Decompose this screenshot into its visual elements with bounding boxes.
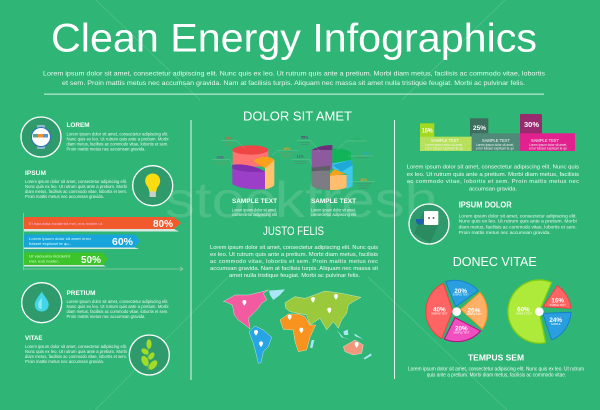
text: justo paragraph: accumsan gravida. Nam at facilisis turpis. Aliquam nec massa sit <box>210 266 378 272</box>
continent: north america <box>223 290 268 329</box>
tab: 30%: SAMPLE TEXT <box>531 138 559 143</box>
labels: 23% <box>217 155 225 159</box>
labels: SAMPLE TEXT <box>453 331 470 334</box>
labels: 18% <box>360 178 368 182</box>
bar: 50% <box>24 252 108 266</box>
tab: 15%: error fuisset explicari te qu <box>425 146 463 150</box>
intro text: Lorem ipsum dolor sit amet, consectetur adipiscing elit. Nunc quis ex leo. Ut rutrum quis ante a pretium. Morbi diam metus, facilisis ac commodo vitae, lobortis <box>43 70 546 78</box>
text: justo paragraph: Lorem ipsum dolor sit amet, consectetur adipiscing elit. Nunc quis <box>210 245 378 251</box>
bar: 60%: Lorem ipsum dolor sit amet error <box>29 236 92 241</box>
icon: power socket <box>409 204 449 244</box>
block: vitae <box>25 335 127 364</box>
chart: pie right <box>508 280 571 343</box>
tab: 30%: error fuisset explicari te qu <box>529 146 567 150</box>
tab: 15% <box>420 123 472 151</box>
labels: SAMPLE TEXT <box>453 294 469 297</box>
chart: 3d pie left <box>212 136 298 189</box>
block: lorem: Proin mattis metus nec accumsan gravida. <box>66 146 146 152</box>
block: lorem: diam metus, facilisis ac commodo vitae, lobortis et sem. <box>66 142 168 146</box>
continent: eurasia <box>285 291 361 330</box>
tab: 30% <box>520 114 575 151</box>
block: vitae: Nunc quis ex leo. Ut rutrum quis ante a pretium. Morbi <box>25 349 127 354</box>
intro text: et sem. Proin mattis metus nec accumsan gravida. Nam at facilisis turpis. Aliquam nec massa sit amet nulla tristique feugiat. Morbi ac pulvinar felis. <box>62 80 525 87</box>
labels: 55% <box>301 136 309 140</box>
caption: sample text right <box>311 198 357 217</box>
block: ipsum: Nunc quis ex leo. Ut rutrum quis ante a pretium. Morbi <box>25 184 127 189</box>
continent: greenland <box>269 289 285 300</box>
block: pretium <box>66 290 168 319</box>
labels <box>431 288 483 334</box>
text: right paragraph: Lorem ipsum dolor sit amet, consectetur adipiscing elit. Nunc quis <box>407 164 579 170</box>
heading: donec vitae: DONEC VITAE <box>453 254 537 269</box>
block: ipsum dolor: diam metus, facilisis ac commodo vitae, lobortis et sem. <box>459 224 577 230</box>
block: ipsum: Lorem ipsum dolor sit amet, consectetur adipiscing elit. <box>25 179 127 184</box>
block: pretium: diam metus, facilisis ac commodo vitae, lobortis et sem. <box>66 309 168 314</box>
tab: 30%: 30% <box>524 122 540 129</box>
labels: 40% <box>433 307 446 314</box>
bar chart <box>24 213 183 271</box>
block: ipsum: Proin mattis metus nec accumsan gravida. <box>25 194 104 199</box>
labels: SAMPLE TEXT <box>466 313 483 316</box>
block: pretium: Lorem ipsum dolor sit amet, consectetur adipiscing elit. <box>66 299 168 304</box>
title: Clean Energy Infographics <box>51 17 537 61</box>
block: lorem <box>66 122 168 152</box>
labels: SAMPLE TEXT <box>516 312 533 315</box>
caption: sample text left: SAMPLE TEXT <box>232 198 278 205</box>
labels: 20% <box>468 307 481 314</box>
continent: australia <box>343 340 363 355</box>
caption: sample text right: consectetur adipiscing elit <box>311 212 357 217</box>
tab: 25%: 25% <box>473 125 486 132</box>
tab: 15%: 15% <box>422 128 433 134</box>
tab: 15%: SAMPLE TEXT <box>431 138 459 143</box>
labels: 16% <box>551 298 564 305</box>
block: vitae: VITAE <box>25 335 43 342</box>
block: pretium: Nunc quis ex leo. Ut rutrum quis ante a pretium. Morbi <box>66 304 168 309</box>
block: vitae: Proin mattis metus nec accumsan gravida. <box>25 359 104 364</box>
icon: water meter <box>21 117 61 157</box>
labels: SAMPLE <box>551 323 561 326</box>
chart: percentage tabs <box>420 114 575 151</box>
block: lorem: Lorem ipsum dolor sit amet, consectetur adipiscing elit. <box>66 132 168 136</box>
bar: 50%: mel, eos noster.. <box>29 258 60 264</box>
tab: 25%: error fuisset explicari te qu <box>476 146 514 150</box>
watermark: stockfresh <box>165 172 438 228</box>
bar: 60% <box>24 234 140 249</box>
block: pretium: Proin mattis metus nec accumsan gravida. <box>66 314 146 319</box>
block: ipsum: diam metus, facilisis ac commodo vitae, lobortis et sem. <box>25 189 127 194</box>
text: right paragraph <box>407 164 579 192</box>
block: ipsum dolor <box>459 200 577 235</box>
labels: 20% <box>454 288 467 295</box>
map pins <box>242 294 359 348</box>
labels: 11% <box>297 154 305 158</box>
block: vitae: diam metus, facilisis ac commodo vitae, lobortis et sem. <box>25 354 127 359</box>
panel: left column <box>21 117 183 375</box>
block: tempus sem: Lorem ipsum dolor sit amet, consectetur adipiscing elit. Nunc quis ex leo. Ut rutrum <box>408 366 584 372</box>
bar: 50%: 50% <box>81 255 101 266</box>
tab: 25% <box>470 118 520 151</box>
caption: sample text right: Lorem ipsum dolor sit amet, <box>311 208 356 212</box>
caption: sample text left: Lorem ipsum dolor sit amet, <box>232 208 277 212</box>
heading: justo felis: JUSTO FELIS <box>263 224 324 238</box>
continent: africa <box>280 314 316 352</box>
intro text <box>43 70 546 87</box>
block: tempus sem: quis ante a pretium. Morbi diam metus, facilisis ac commodo vitae. <box>427 372 566 378</box>
world map <box>223 289 372 363</box>
block: ipsum dolor: Proin mattis metus nec accumsan gravida. <box>459 230 551 235</box>
block: ipsum dolor: Lorem ipsum dolor sit amet, consectetur adipiscing elit. <box>459 214 577 218</box>
tab: 25%: SAMPLE TEXT <box>482 138 510 143</box>
labels: 6% <box>363 152 369 156</box>
block: lorem: Nunc quis ex leo. Ut rutrum quis ante a pretium. Morbi <box>66 136 168 142</box>
labels: 60% <box>225 136 233 140</box>
bar: 60%: fuisset explicari te qu.. <box>29 241 71 246</box>
block: ipsum dolor: IPSUM DOLOR <box>459 200 512 209</box>
block: ipsum dolor: Nunc quis ex leo. Ut rutrum quis ante a pretium. Morbi <box>459 218 577 224</box>
chart: 3d pie right <box>292 136 375 190</box>
islands <box>310 329 372 359</box>
bar: 50%: Ut vacuuma inciderint <box>29 254 71 258</box>
labels: 10% <box>353 137 361 141</box>
block: vitae: Lorem ipsum dolor sit amet, consectetur adipiscing elit. <box>25 344 127 349</box>
chart: pie left <box>426 280 487 342</box>
labels: SAMPLE TEXT <box>431 313 448 316</box>
heading: dolor sit amet: DOLOR SIT AMET <box>243 108 352 124</box>
block: pretium: PRETIUM <box>66 290 96 297</box>
text: justo paragraph: amet nulla tristique feugiat. Morbi ac pulvinar felis. <box>229 273 360 279</box>
bar: 80%: 80% <box>153 219 173 230</box>
labels <box>516 298 566 326</box>
icon: leaves <box>129 335 169 375</box>
block: tempus sem <box>408 353 584 378</box>
labels: 60% <box>517 306 530 313</box>
text: justo paragraph: ex leo. Ut rutrum quis ante a pretium. Morbi diam metus, facilisis <box>210 252 378 258</box>
icon: water drop <box>22 283 62 323</box>
text: right paragraph: ac commodo vitae, lobortis et sem. Proin mattis metus nec <box>407 179 579 185</box>
continent: south america <box>249 326 272 363</box>
caption: sample text left <box>232 198 278 217</box>
bar: 60%: 60% <box>112 237 133 248</box>
labels <box>292 136 375 188</box>
icon: light bulb <box>133 166 173 206</box>
block: lorem: LOREM <box>66 122 90 129</box>
labels <box>212 136 298 165</box>
text: justo paragraph <box>210 245 378 279</box>
labels: 20% <box>455 325 468 332</box>
labels: 24% <box>549 317 562 324</box>
caption: sample text right: SAMPLE TEXT <box>311 198 357 205</box>
text: justo paragraph: ac commodo vitae, lobortis et sem. Proin mattis metus nec <box>210 259 378 265</box>
tab: 30%: Lorem ipsum dolor sit amet, <box>529 143 567 147</box>
text: right paragraph: ex leo. Ut rutrum quis ante a pretium. Morbi diam metus, facilisis <box>407 172 579 178</box>
block: tempus sem: TEMPUS SEM <box>468 353 524 363</box>
tab: 25%: Lorem ipsum dolor sit amet, <box>476 143 514 147</box>
tab: 15%: Lorem ipsum dolor sit amet, <box>425 143 463 147</box>
block: ipsum: IPSUM <box>25 170 46 177</box>
block: ipsum <box>25 170 127 199</box>
text: right paragraph: accumsan gravida. <box>469 186 517 192</box>
bar: 80%: Ei iracundia inciderint mei, eos noster ut. <box>29 221 103 226</box>
bar: 80% <box>24 217 181 232</box>
labels: 19% <box>283 147 291 151</box>
labels: SAMPLE TEXT <box>550 304 566 307</box>
caption: sample text left: consectetur adipiscing elit <box>232 212 278 217</box>
